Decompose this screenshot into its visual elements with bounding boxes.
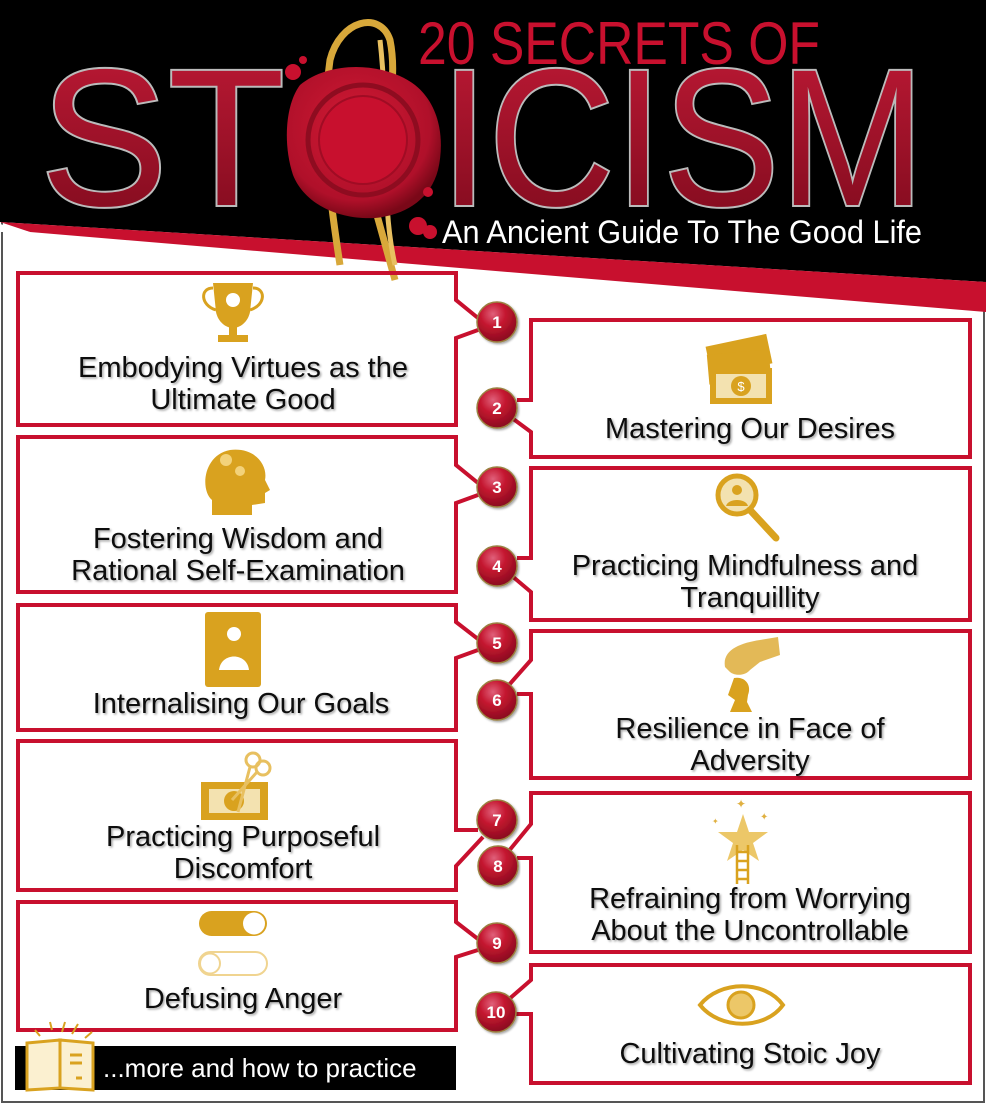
number circles: 10 [487,1003,505,1022]
icon: head with gears [205,450,270,515]
box texts: Embodying Virtues as the [78,352,408,384]
icon: wax seal with rope [285,23,441,280]
box texts: Adversity [690,745,810,777]
box texts: Mastering Our Desires [605,413,895,445]
box texts: Ultimate Good [150,384,336,416]
icon: star with ladder: ✦ [760,812,768,823]
number circles: 7 [492,811,502,830]
number circles: 6 [492,691,502,710]
number circles: 4 [492,557,502,576]
title: STOICISM: ST [40,29,285,247]
number circles [476,302,518,1032]
icon: money stack: $ [737,379,745,394]
footer: more and how to practice [15,1022,456,1090]
box texts: About the Uncontrollable [591,915,909,947]
number circles: 8 [493,857,503,876]
title: 20 SECRETS OF: 20 SECRETS OF [418,10,820,77]
number circles: 5 [492,634,502,653]
box texts: Practicing Mindfulness and [572,550,918,582]
title: STOICISM: ICISM [440,29,925,247]
box texts: Internalising Our Goals [93,688,389,720]
icon: money with scissors [201,753,270,820]
box texts: Practicing Purposeful [106,821,380,853]
icon: toggle switches [199,911,267,975]
number circles: 2 [492,399,502,418]
icon: star with ladder: ✦ [736,797,746,811]
subtitle: An Ancient Guide To The Good Life [442,214,922,250]
icon: magnifier [718,476,776,538]
box texts: Rational Self-Examination [71,555,405,587]
number circles: 3 [492,478,502,497]
box texts: Resilience in Face of [615,713,886,745]
box texts: Cultivating Stoic Joy [619,1038,881,1070]
box texts [71,352,918,1070]
icon: star with ladder: ✦ [712,817,719,826]
title: STOICISM [40,29,925,247]
box texts: Defusing Anger [144,983,342,1015]
icon: hand with chess knight [725,637,780,712]
connector boxes [18,273,970,1083]
header background [0,0,986,312]
icon: eye [700,986,783,1024]
box texts: Discomfort [174,853,312,885]
box texts: Fostering Wisdom and [93,523,383,555]
number circles: 1 [492,313,502,332]
icon: money stack [706,334,772,404]
icon: notebook [205,612,261,687]
icon: star with ladder [712,797,768,884]
box texts: Refraining from Worrying [589,883,911,915]
number circles: 9 [492,934,502,953]
box texts: Tranquillity [680,582,820,614]
icon: trophy [204,283,262,342]
footer: more and how to practice: ...more and how to practice [103,1053,417,1083]
